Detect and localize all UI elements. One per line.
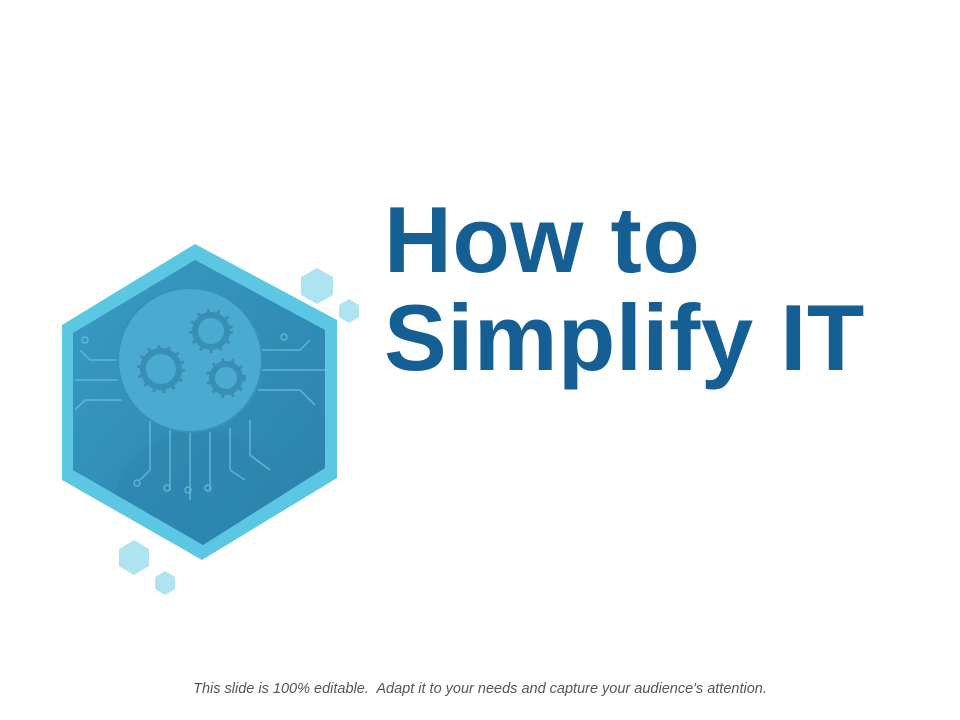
small hexagons xyxy=(119,268,359,595)
title xyxy=(384,187,865,390)
footer note: This slide is 100% editable. Adapt it to your needs and capture your audience's attention. xyxy=(193,681,767,697)
inner image xyxy=(73,260,325,545)
title: How to xyxy=(384,187,700,292)
hexagon graphic xyxy=(62,244,359,595)
title: Simplify IT xyxy=(384,285,865,390)
outer hexagon frame xyxy=(62,244,337,560)
gear circle xyxy=(118,288,262,432)
